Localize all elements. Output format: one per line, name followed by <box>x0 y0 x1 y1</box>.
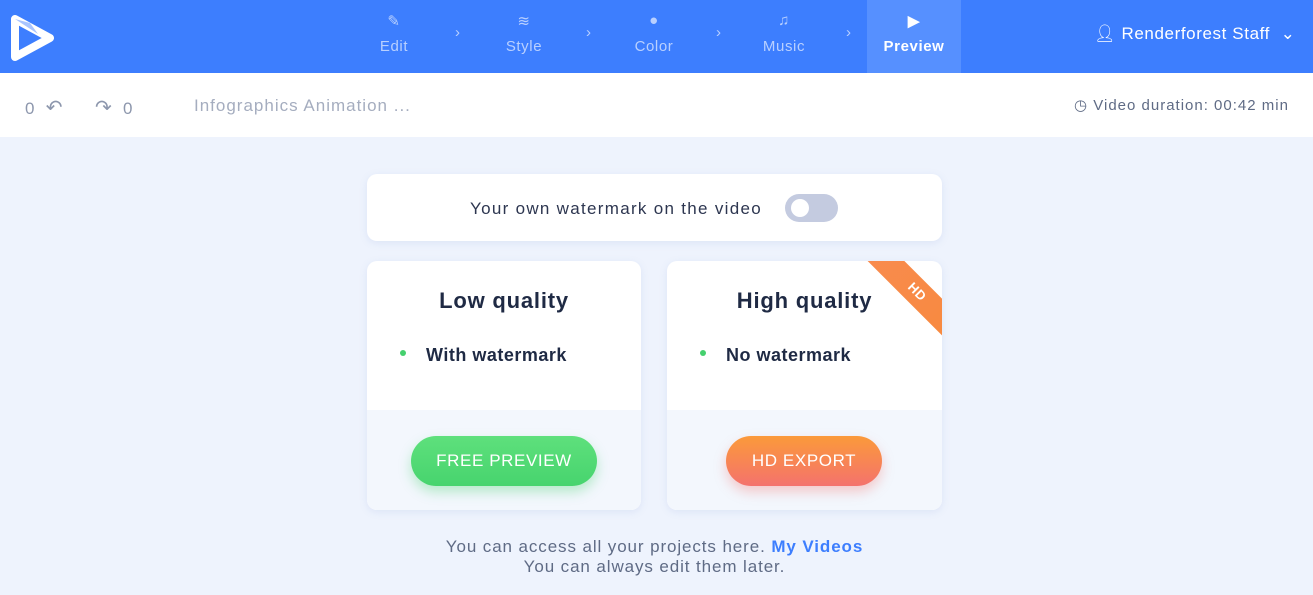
heading low: Low quality <box>439 288 569 313</box>
ribbon HD <box>862 237 972 347</box>
project name: Infographics Animation ... <box>194 96 411 115</box>
card: low quality <box>367 261 641 510</box>
watermark card <box>367 174 942 241</box>
toolbar <box>0 73 1313 137</box>
tab: Edit: Edit <box>380 38 408 55</box>
hd export button: HD EXPORT <box>752 451 856 470</box>
duration: ◷ Video duration: 00:42 min <box>1074 97 1289 114</box>
user menu: 👤︎ Renderforest Staff ⌄ <box>1094 24 1295 43</box>
tab: Style <box>506 13 542 55</box>
chevron: › <box>455 24 461 41</box>
chevron: › <box>586 24 592 41</box>
ribbon HD: HD <box>905 279 930 304</box>
undo redo: 0 ↶ ↷ 0 <box>25 97 133 119</box>
chevron: › <box>846 24 852 41</box>
tab: Color <box>635 12 673 55</box>
bullet: No watermark <box>726 345 851 365</box>
toggle <box>785 194 838 222</box>
card: high quality <box>667 261 942 510</box>
tab: Preview active <box>867 0 961 73</box>
tab: Preview active: ▶ <box>908 13 920 30</box>
tab: Preview active: Preview <box>884 38 944 55</box>
tab: Music: ♫ <box>778 12 790 29</box>
tab: Music <box>763 12 805 55</box>
tab: Edit <box>380 13 408 55</box>
free preview button <box>411 436 597 486</box>
footer text <box>446 537 863 576</box>
tab: Edit: ✎ <box>387 13 401 30</box>
watermark label: Your own watermark on the video <box>470 199 762 218</box>
tab: Style: Style <box>506 38 542 55</box>
hd export button <box>726 436 882 486</box>
tab: Style: ≋ <box>517 13 531 30</box>
heading high: High quality <box>737 288 872 313</box>
bullet: With watermark <box>426 345 567 365</box>
footer text: You can always edit them later. <box>524 557 785 576</box>
tab: Music: Music <box>763 38 805 55</box>
tab: Color: ● <box>649 12 659 29</box>
footer text: You can access all your projects here. My Videos <box>446 537 863 556</box>
free preview button: FREE PREVIEW <box>436 451 572 470</box>
header bar <box>0 0 1313 73</box>
chevron: › <box>716 24 722 41</box>
tab: Color: Color <box>635 38 673 55</box>
logo <box>11 15 54 61</box>
